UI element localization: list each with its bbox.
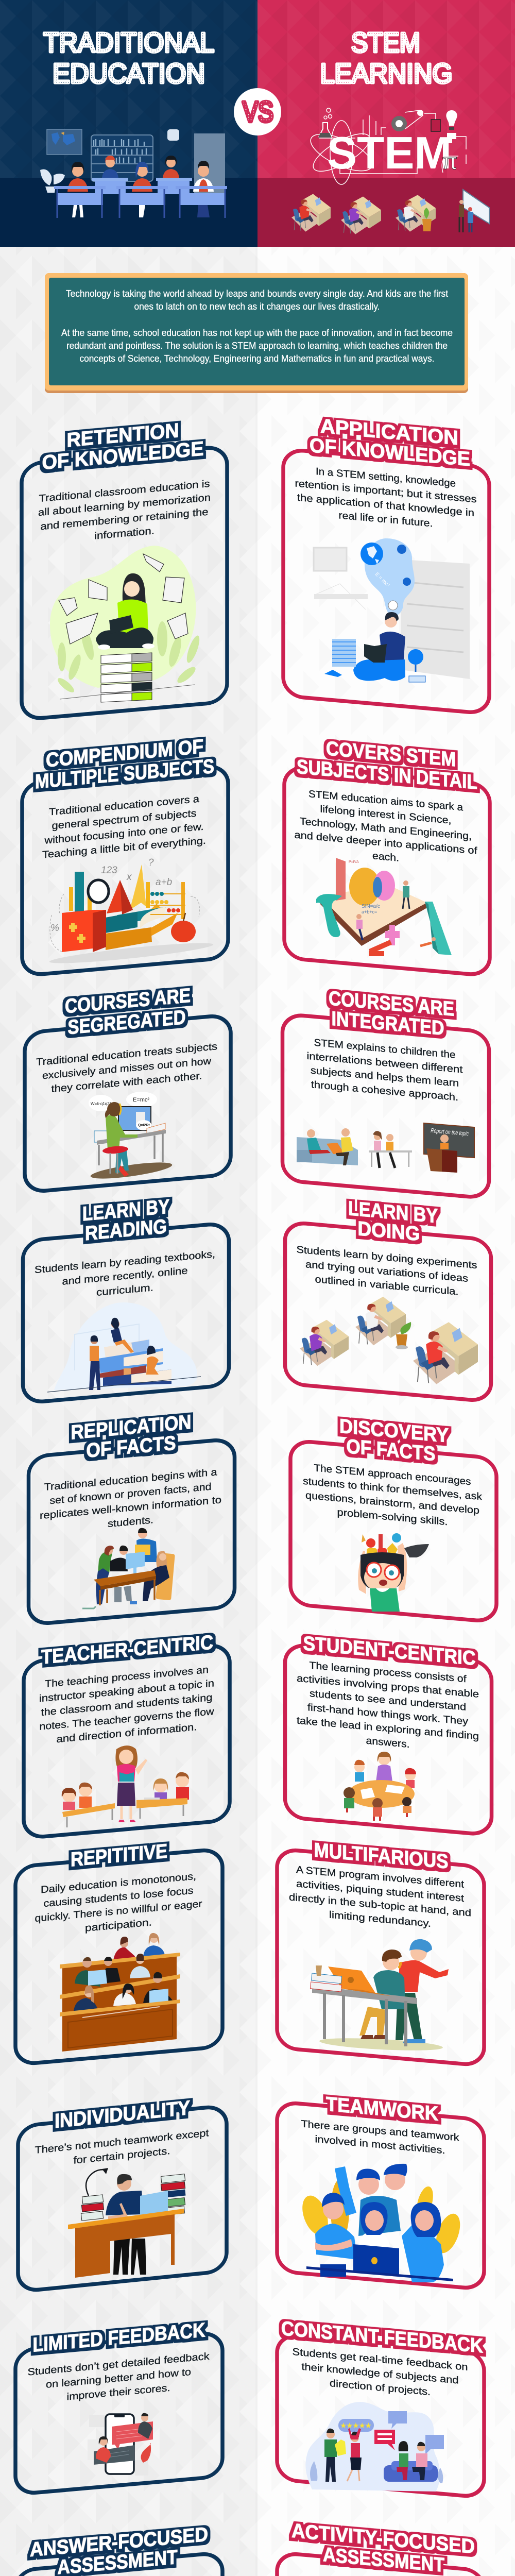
illustration: open book with math: SIN=a/c <box>362 904 380 909</box>
body text: replicates well-known information to <box>40 1494 221 1521</box>
body text <box>35 1248 215 1304</box>
heading: REPITITIVE <box>71 1840 167 1871</box>
card frame <box>22 446 227 720</box>
body text <box>35 2127 209 2170</box>
card frame <box>283 449 489 714</box>
body text: outlined in variable curricula. <box>315 1274 458 1298</box>
body text: The STEM approach encourages <box>314 1462 471 1487</box>
body text: on learning better and how to <box>46 2366 191 2391</box>
illustration: student imagining knowledge <box>314 538 470 682</box>
body text: STEM explains to children the <box>314 1037 455 1061</box>
body text: Daily education is monotonous, <box>41 1871 196 1895</box>
body text: participation. <box>85 1917 152 1934</box>
body text: lifelong interest in Science, <box>320 803 451 826</box>
body text: subjects and helps them learn <box>311 1065 459 1089</box>
panel: constant feedback <box>277 2317 484 2498</box>
heading: READING <box>85 1215 167 1245</box>
vs badge <box>234 88 281 135</box>
title: stem learning: STEM <box>351 27 420 58</box>
body text: quickly. There is no willful or eager <box>35 1898 202 1924</box>
illustration: school supplies: 123 <box>101 865 117 876</box>
heading: CONSTANT FEEDBACK <box>281 2317 483 2358</box>
heading: STUDENT-CENTRIC <box>303 1633 476 1670</box>
panel: activity-focused assessment <box>277 2518 484 2576</box>
icon: wall map <box>47 129 82 155</box>
heading <box>42 417 204 474</box>
card frame <box>15 1849 222 2065</box>
intro text: redundant and pointless. The solution is a STEM approach to learning, which teaches children the <box>66 341 448 351</box>
card content: doing <box>285 1192 491 1402</box>
body text: causing students to lose focus <box>43 1885 194 1909</box>
illustration: student at computer: E=mc² <box>133 1097 149 1103</box>
students at desks row <box>291 194 436 234</box>
body text: general spectrum of subjects <box>52 808 197 832</box>
panel: limited feedback <box>15 2317 222 2495</box>
card content: replication <box>29 1407 235 1625</box>
heading <box>65 985 191 1039</box>
body text: and trying out variations of ideas <box>305 1259 468 1284</box>
body text: There are groups and teamwork <box>301 2118 459 2143</box>
heading <box>297 735 477 793</box>
heading: TEACHER-CENTRIC <box>41 1631 213 1669</box>
body text: real life or in future. <box>338 510 433 529</box>
panel: replication of facts <box>29 1407 235 1625</box>
body text: Students don’t get detailed feedback <box>27 2351 210 2378</box>
heading: SUBJECTS IN DETAIL <box>297 756 477 793</box>
illustration: girl with ideas from open head <box>358 1533 429 1612</box>
illustration: open book with math <box>316 858 452 956</box>
body text <box>303 1462 482 1531</box>
panel: multifarious <box>277 1836 484 2066</box>
heading <box>71 1411 192 1463</box>
illustration: school supplies <box>49 857 214 967</box>
card frame <box>277 2334 484 2498</box>
illustration: group study scenes: Report on the topic <box>431 1127 469 1137</box>
illustration: students on giant books <box>47 1302 201 1392</box>
body text: students. <box>108 1514 153 1530</box>
title: traditional education: TRADITIONAL <box>43 27 214 58</box>
body text: and more recently, online <box>62 1265 188 1287</box>
card frame <box>285 1222 491 1402</box>
heading: TEAMWORK <box>326 2093 438 2125</box>
card content: repititive <box>15 1835 222 2065</box>
body text: each. <box>372 850 399 864</box>
icon: stem word art <box>306 108 466 184</box>
body text: activities involving props that enable <box>297 1673 479 1700</box>
heading: DOING <box>358 1217 420 1245</box>
illustration: student at computer <box>89 1092 173 1182</box>
illustration: open book with math: a+b+c= <box>362 909 377 914</box>
body text: and direction of information. <box>57 1721 197 1745</box>
panel: teacher-centric <box>24 1630 230 1838</box>
card frame <box>284 766 490 976</box>
panel: traditional education header <box>0 0 258 247</box>
body text: limiting redundancy. <box>329 1909 431 1929</box>
illustration: cheering team <box>298 2164 465 2282</box>
heading: OF KNOWLEDGE <box>42 438 204 474</box>
card content: constant feedback <box>277 2317 484 2498</box>
heading: COURSES ARE <box>65 985 191 1018</box>
body text: through a cohesive approach. <box>311 1079 458 1103</box>
heading: COURSES ARE <box>329 987 454 1021</box>
illustration: school supplies: a+b <box>156 877 172 888</box>
card content: student-centric <box>285 1631 491 1835</box>
vs badge: VS <box>243 95 273 128</box>
title: stem learning: LEARNING <box>320 58 452 89</box>
card content: teamwork <box>277 2089 484 2290</box>
heading <box>339 1415 449 1466</box>
heading: COVERS STEM <box>326 737 456 771</box>
body text: notes. The teacher governs the flow <box>39 1706 214 1733</box>
panel: covers stem subjects in detail <box>284 734 490 976</box>
illustration: student alone at desk <box>68 2168 185 2278</box>
card content: answer-focused <box>15 2522 222 2576</box>
heading: MULTIFARIOUS <box>314 1839 449 1873</box>
panel: discovery of facts <box>290 1411 496 1622</box>
panel: repititive <box>15 1835 222 2065</box>
title: traditional education: EDUCATION <box>53 58 205 89</box>
card content: application of knowledge <box>283 412 489 714</box>
heading: ANSWER-FOCUSED <box>30 2523 208 2561</box>
illustration: girl reading on books <box>50 546 202 702</box>
heading: RETENTION <box>66 419 179 451</box>
heading: ACTIVITY-FOCUSED <box>291 2520 475 2558</box>
heading: INDIVIDUALITY <box>55 2097 190 2132</box>
heading <box>30 2523 208 2576</box>
card frame <box>18 2106 227 2292</box>
heading <box>82 1196 169 1245</box>
intro text: Technology is taking the world ahead by leaps and bounds every single day. And kids are the first <box>66 289 448 299</box>
heading <box>348 1197 438 1247</box>
body text: STEM education aims to spark a <box>308 788 463 813</box>
card content: teacher-centric <box>24 1630 230 1838</box>
body text: Traditional education covers a <box>49 793 199 818</box>
illustration: group study scenes <box>297 1123 474 1173</box>
intro text: At the same time, school education has not kept up with the pace of innovation, and in fact become <box>61 328 453 338</box>
heading <box>35 735 214 793</box>
heading: OF KNOWLEDGE <box>310 434 470 470</box>
heading: REPLICATION <box>71 1411 192 1444</box>
panel: compendium of multiple subjects <box>22 733 228 976</box>
body text: information. <box>94 525 154 542</box>
body text: The learning process consists of <box>309 1660 467 1685</box>
icon: stem word art: STEM <box>327 127 452 178</box>
body text: Students learn by doing experiments <box>296 1244 477 1271</box>
body text: first-hand how things work. They <box>307 1702 468 1727</box>
body text: retention is important; but it stresses <box>295 478 477 505</box>
body text <box>289 1863 471 1933</box>
body text: involved in most activities. <box>315 2133 445 2156</box>
illustration: children around table <box>344 1752 416 1821</box>
body text: all about learning by memorization <box>38 492 211 518</box>
heading: LIMITED FEEDBACK <box>33 2319 205 2357</box>
heading: MULTIPLE SUBJECTS <box>35 755 214 793</box>
body text <box>35 1870 202 1938</box>
heading: LEARN BY <box>348 1197 438 1227</box>
body text <box>295 787 477 871</box>
title: traditional education <box>43 27 214 89</box>
panel: courses are integrated <box>282 983 489 1198</box>
card frame <box>15 2332 222 2495</box>
card content: reading <box>23 1190 229 1403</box>
card content: compendium <box>22 733 228 976</box>
panel: learn by reading <box>23 1190 229 1403</box>
body text: curriculum. <box>96 1282 153 1298</box>
card frame <box>282 1014 489 1198</box>
card content: integrated <box>282 983 489 1198</box>
heading: OF FACTS <box>346 1435 435 1465</box>
heading: SEGREGATED <box>68 1006 186 1039</box>
body text <box>297 1244 477 1299</box>
body text: A STEM program involves different <box>296 1864 465 1890</box>
students and desks <box>54 156 227 218</box>
panel: stem learning header <box>258 0 515 247</box>
body text <box>293 2346 468 2401</box>
illustration: student imagining knowledge: E = mc² <box>374 571 391 588</box>
card frame <box>29 1438 235 1625</box>
body text <box>39 1664 214 1747</box>
body text: students to think for themselves, ask <box>303 1476 482 1502</box>
heading: INTEGRATED <box>332 1008 444 1040</box>
illustration: school supplies: ? <box>148 857 154 868</box>
body text: take the lead in exploring and finding <box>297 1715 479 1742</box>
body text: problem-solving skills. <box>337 1506 448 1528</box>
illustration: teacher and pupils <box>62 1745 189 1827</box>
icon: plant <box>40 169 65 193</box>
header <box>0 0 515 247</box>
whiteboard with teachers <box>459 190 489 232</box>
body text: exclusively and misses out on how <box>42 1055 212 1081</box>
heading: DISCOVERY <box>339 1415 449 1447</box>
body text: Teaching a little bit of everything. <box>42 835 206 861</box>
card content: multifarious <box>277 1836 484 2066</box>
body text: their knowledge of subjects and <box>301 2361 458 2386</box>
body text: There’s not much teamwork except <box>35 2127 209 2156</box>
body text: Traditional education treats subjects <box>36 1041 217 1068</box>
panel: answer-focused assessment <box>15 2522 222 2576</box>
card frame <box>277 2552 484 2576</box>
illustration: school supplies: % <box>50 923 59 934</box>
body text: the classroom and students taking <box>41 1692 212 1718</box>
body text: directly in the sub-topic at hand, and <box>289 1891 471 1919</box>
body text <box>297 1658 479 1756</box>
panel: application of knowledge <box>283 412 489 714</box>
body text <box>301 2118 459 2158</box>
intro text: concepts of Science, Technology, Engineering and Mathematics in fun and practical ways. <box>79 353 435 364</box>
heading: APPLICATION <box>320 415 458 449</box>
card frame <box>15 2552 222 2576</box>
body text: answers. <box>366 1735 410 1750</box>
card content: covers stem <box>284 734 490 976</box>
body text: The teaching process involves an <box>45 1664 209 1690</box>
panel: individuality <box>18 2093 227 2292</box>
illustration: isometric students at desks <box>300 1297 478 1384</box>
body text <box>40 1466 221 1536</box>
body text: Traditional classroom education is <box>39 478 210 504</box>
body text: without focusing into one or few. <box>44 821 204 846</box>
body text: Students get real-time feedback on <box>292 2346 468 2373</box>
panel: retention of knowledge <box>22 415 227 720</box>
card frame <box>290 1440 496 1622</box>
heading <box>310 414 470 470</box>
illustration: people giving ratings: ★★★★★ <box>340 2421 372 2430</box>
panel: learn by doing <box>285 1192 491 1402</box>
body text <box>42 793 206 861</box>
door <box>194 133 225 193</box>
card frame <box>25 1014 231 1193</box>
body text <box>38 478 211 547</box>
card content: retention of knowledge <box>22 415 227 720</box>
illustration: phone chat <box>88 2413 153 2476</box>
body text: In a STEM setting, knowledge <box>316 466 456 489</box>
body text: Students learn by reading textbooks, <box>35 1248 215 1276</box>
intro text: ones to latch on to new tech as it changes our lives drastically. <box>134 301 380 312</box>
card frame <box>23 1223 229 1403</box>
body text <box>36 1041 217 1096</box>
body text <box>295 464 477 533</box>
body text: the application of that knowledge in <box>297 492 474 519</box>
panel: teamwork <box>277 2089 484 2290</box>
heading <box>329 987 454 1041</box>
title: stem learning <box>320 27 452 89</box>
body text: improve their scores. <box>67 2382 170 2403</box>
panel: student-centric <box>285 1631 491 1835</box>
illustration: students around desk <box>82 1528 175 1608</box>
body text: and remembering or retaining the <box>40 506 209 532</box>
illustration: open book with math: P=F/A <box>349 860 359 864</box>
body text: Technology, Math and Engineering, <box>300 816 472 842</box>
body text <box>307 1037 463 1104</box>
body text: Traditional education begins with a <box>44 1466 217 1493</box>
heading: OF FACTS <box>86 1432 176 1462</box>
body text: set of known or proven facts, and <box>49 1481 211 1506</box>
intro text <box>61 289 453 364</box>
card frame <box>285 1644 491 1835</box>
body text <box>27 2351 210 2406</box>
body text: for certain projects. <box>74 2145 170 2166</box>
illustration: student at computer: Q=I2Rt <box>138 1124 150 1127</box>
illustration: lecture hall students <box>60 1933 180 2052</box>
heading: LEARN BY <box>82 1196 169 1225</box>
card content: segregated <box>25 981 231 1193</box>
body text: activities, piquing student interest <box>296 1878 465 1904</box>
card content: discovery <box>290 1411 496 1622</box>
body text: questions, brainstorm, and develop <box>305 1490 479 1516</box>
icon: clock <box>167 129 179 141</box>
body text: and delve deeper into applications of <box>294 829 477 857</box>
panel: introduction chalkboard <box>45 273 468 393</box>
heading: COMPENDIUM OF <box>46 736 203 772</box>
card frame <box>277 1849 484 2066</box>
illustration: people giving ratings <box>305 2402 444 2492</box>
icon: stem word art: π <box>442 149 457 174</box>
body text: students to see and understand <box>310 1688 466 1713</box>
illustration: two boys at laptop <box>310 1939 449 2053</box>
body text: direction of projects. <box>330 2378 431 2398</box>
card frame <box>24 1644 230 1838</box>
card frame <box>22 765 228 976</box>
body text: they correlate with each other. <box>51 1070 202 1095</box>
card content: individuality <box>18 2093 227 2292</box>
bookshelf <box>91 135 153 181</box>
body text: interrelations between different <box>306 1050 463 1076</box>
illustration: student at computer: W=k·q1q2/r <box>91 1101 112 1106</box>
card frame <box>277 2102 484 2290</box>
heading <box>291 2520 475 2576</box>
illustration: school supplies: x <box>126 872 132 883</box>
card content: limited feedback <box>15 2317 222 2495</box>
card content: activity-focused <box>277 2518 484 2576</box>
body text: instructor speaking about a topic in <box>39 1677 214 1704</box>
panel: courses are segregated <box>25 981 231 1193</box>
